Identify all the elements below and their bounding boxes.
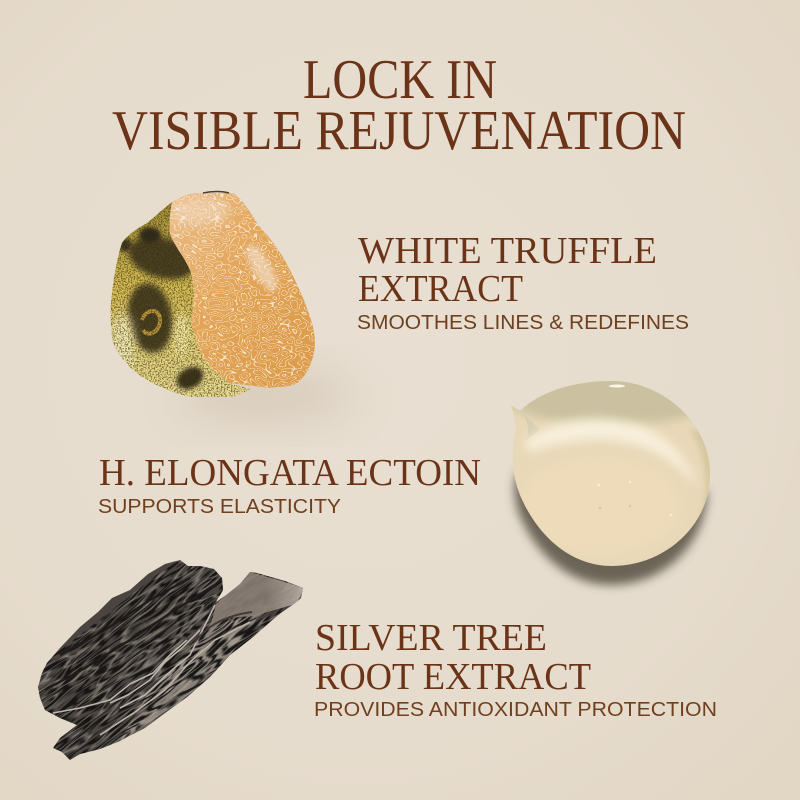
text: h. elongata ectoin: SUPPORTS ELASTICITY xyxy=(98,496,341,518)
title: VISIBLE REJUVENATION xyxy=(112,100,686,162)
title: LOCK IN xyxy=(303,49,497,111)
text: silver tree root extract: ROOT EXTRACT xyxy=(315,656,591,698)
text: silver tree root extract: SILVER TREE xyxy=(315,617,547,659)
icon: gel drop xyxy=(502,365,722,585)
title xyxy=(112,49,686,162)
icon: white truffle xyxy=(105,190,355,421)
text: h. elongata ectoin: H. ELONGATA ECTOIN xyxy=(99,452,481,494)
text: white truffle extract: SMOOTHES LINES & REDEFINES xyxy=(357,312,689,334)
text: silver tree root extract xyxy=(314,617,717,721)
text: white truffle extract: WHITE TRUFFLE xyxy=(358,230,657,272)
icon: silver tree root bark xyxy=(38,560,303,760)
text: white truffle extract: EXTRACT xyxy=(358,268,523,310)
text: h. elongata ectoin xyxy=(98,452,481,518)
text: white truffle extract xyxy=(357,230,689,334)
text: silver tree root extract: PROVIDES ANTIOXIDANT PROTECTION xyxy=(314,699,717,721)
